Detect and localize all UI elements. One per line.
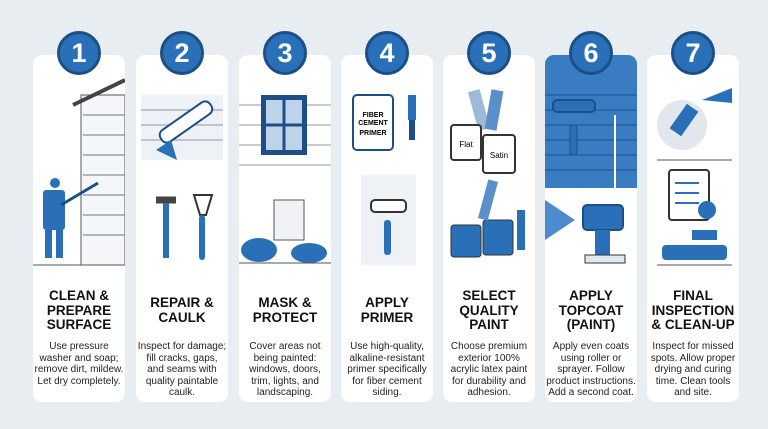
- card 7: [647, 55, 739, 402]
- icon: paint cans and swatches: Flat: [459, 140, 473, 149]
- title: APPLY: [365, 295, 409, 310]
- title: SURFACE: [47, 317, 111, 332]
- title: [459, 288, 519, 332]
- title: [558, 288, 624, 332]
- title: SELECT: [462, 288, 516, 303]
- icon: primer can and roller: FIBER: [362, 112, 384, 119]
- body text: Inspect for damage; fill cracks, gaps, and seams with quality paintable caulk.: [138, 341, 226, 398]
- card 5: [443, 55, 535, 402]
- card 3: [239, 55, 331, 402]
- body text: Use pressure washer and soap; remove dirt, mildew. Let dry completely.: [35, 341, 123, 386]
- title: PREPARE: [47, 302, 111, 318]
- card 6: [545, 55, 637, 402]
- icon: brush, checklist, tools: [657, 88, 732, 266]
- card 1: [33, 55, 125, 402]
- title: [651, 288, 735, 332]
- icon: primer can and roller: CEMENT: [358, 120, 388, 127]
- icon: primer can and roller: [352, 94, 416, 265]
- number 1: [57, 31, 101, 75]
- title: [150, 295, 214, 324]
- card 2: [136, 55, 228, 402]
- title: PROTECT: [253, 310, 317, 324]
- number 7: 7: [685, 38, 701, 68]
- title: MASK &: [258, 295, 312, 310]
- title: CAULK: [158, 310, 206, 324]
- icon: primer can and roller: PRIMER: [359, 130, 387, 137]
- number 5: 5: [481, 38, 497, 68]
- number 2: [160, 31, 204, 75]
- title: & CLEAN-UP: [651, 317, 735, 332]
- body text: Use high-quality, alkaline-resistant primer specifically for fiber cement siding.: [347, 341, 427, 398]
- title: QUALITY: [459, 302, 519, 318]
- title: [47, 288, 111, 332]
- number 3: 3: [277, 38, 293, 68]
- icon: paint cans and swatches: [450, 89, 525, 258]
- title: CLEAN &: [49, 288, 109, 303]
- title: PRIMER: [361, 310, 413, 324]
- icon: paint cans and swatches: Satin: [490, 151, 508, 160]
- body text: Apply even coats using roller or sprayer. Follow product instructions. Add a second coat.: [546, 341, 636, 398]
- card 4: [341, 55, 433, 402]
- icon: roller and sprayer: [545, 55, 637, 264]
- body text: Inspect for missed spots. Allow proper drying and curing time. Clean tools and site.: [651, 341, 735, 398]
- title: APPLY: [569, 288, 613, 303]
- icon: masked window and shrub: [239, 95, 331, 264]
- title: TOPCOAT: [559, 302, 623, 318]
- title: (PAINT): [567, 317, 615, 332]
- number 4: [365, 31, 409, 75]
- icon: caulk gun and tools: [141, 95, 223, 260]
- title: PAINT: [469, 317, 509, 332]
- number 5: [467, 31, 511, 75]
- title: [253, 295, 318, 324]
- number 4: 4: [379, 38, 395, 68]
- title: INSPECTION: [652, 302, 734, 318]
- number 7: [671, 31, 715, 75]
- body text: Choose premium exterior 100% acrylic latex paint for durability and adhesion.: [451, 341, 527, 398]
- number 3: [263, 31, 307, 75]
- title: [361, 295, 413, 324]
- number 6: [569, 31, 613, 75]
- number 2: 2: [174, 38, 190, 68]
- number 1: 1: [71, 38, 87, 68]
- title: FINAL: [673, 288, 713, 303]
- number 6: 6: [583, 38, 599, 68]
- icon: house washing: [33, 78, 125, 266]
- title: REPAIR &: [150, 295, 214, 310]
- body text: Cover areas not being painted: windows, doors, trim, lights, and landscaping.: [249, 341, 321, 398]
